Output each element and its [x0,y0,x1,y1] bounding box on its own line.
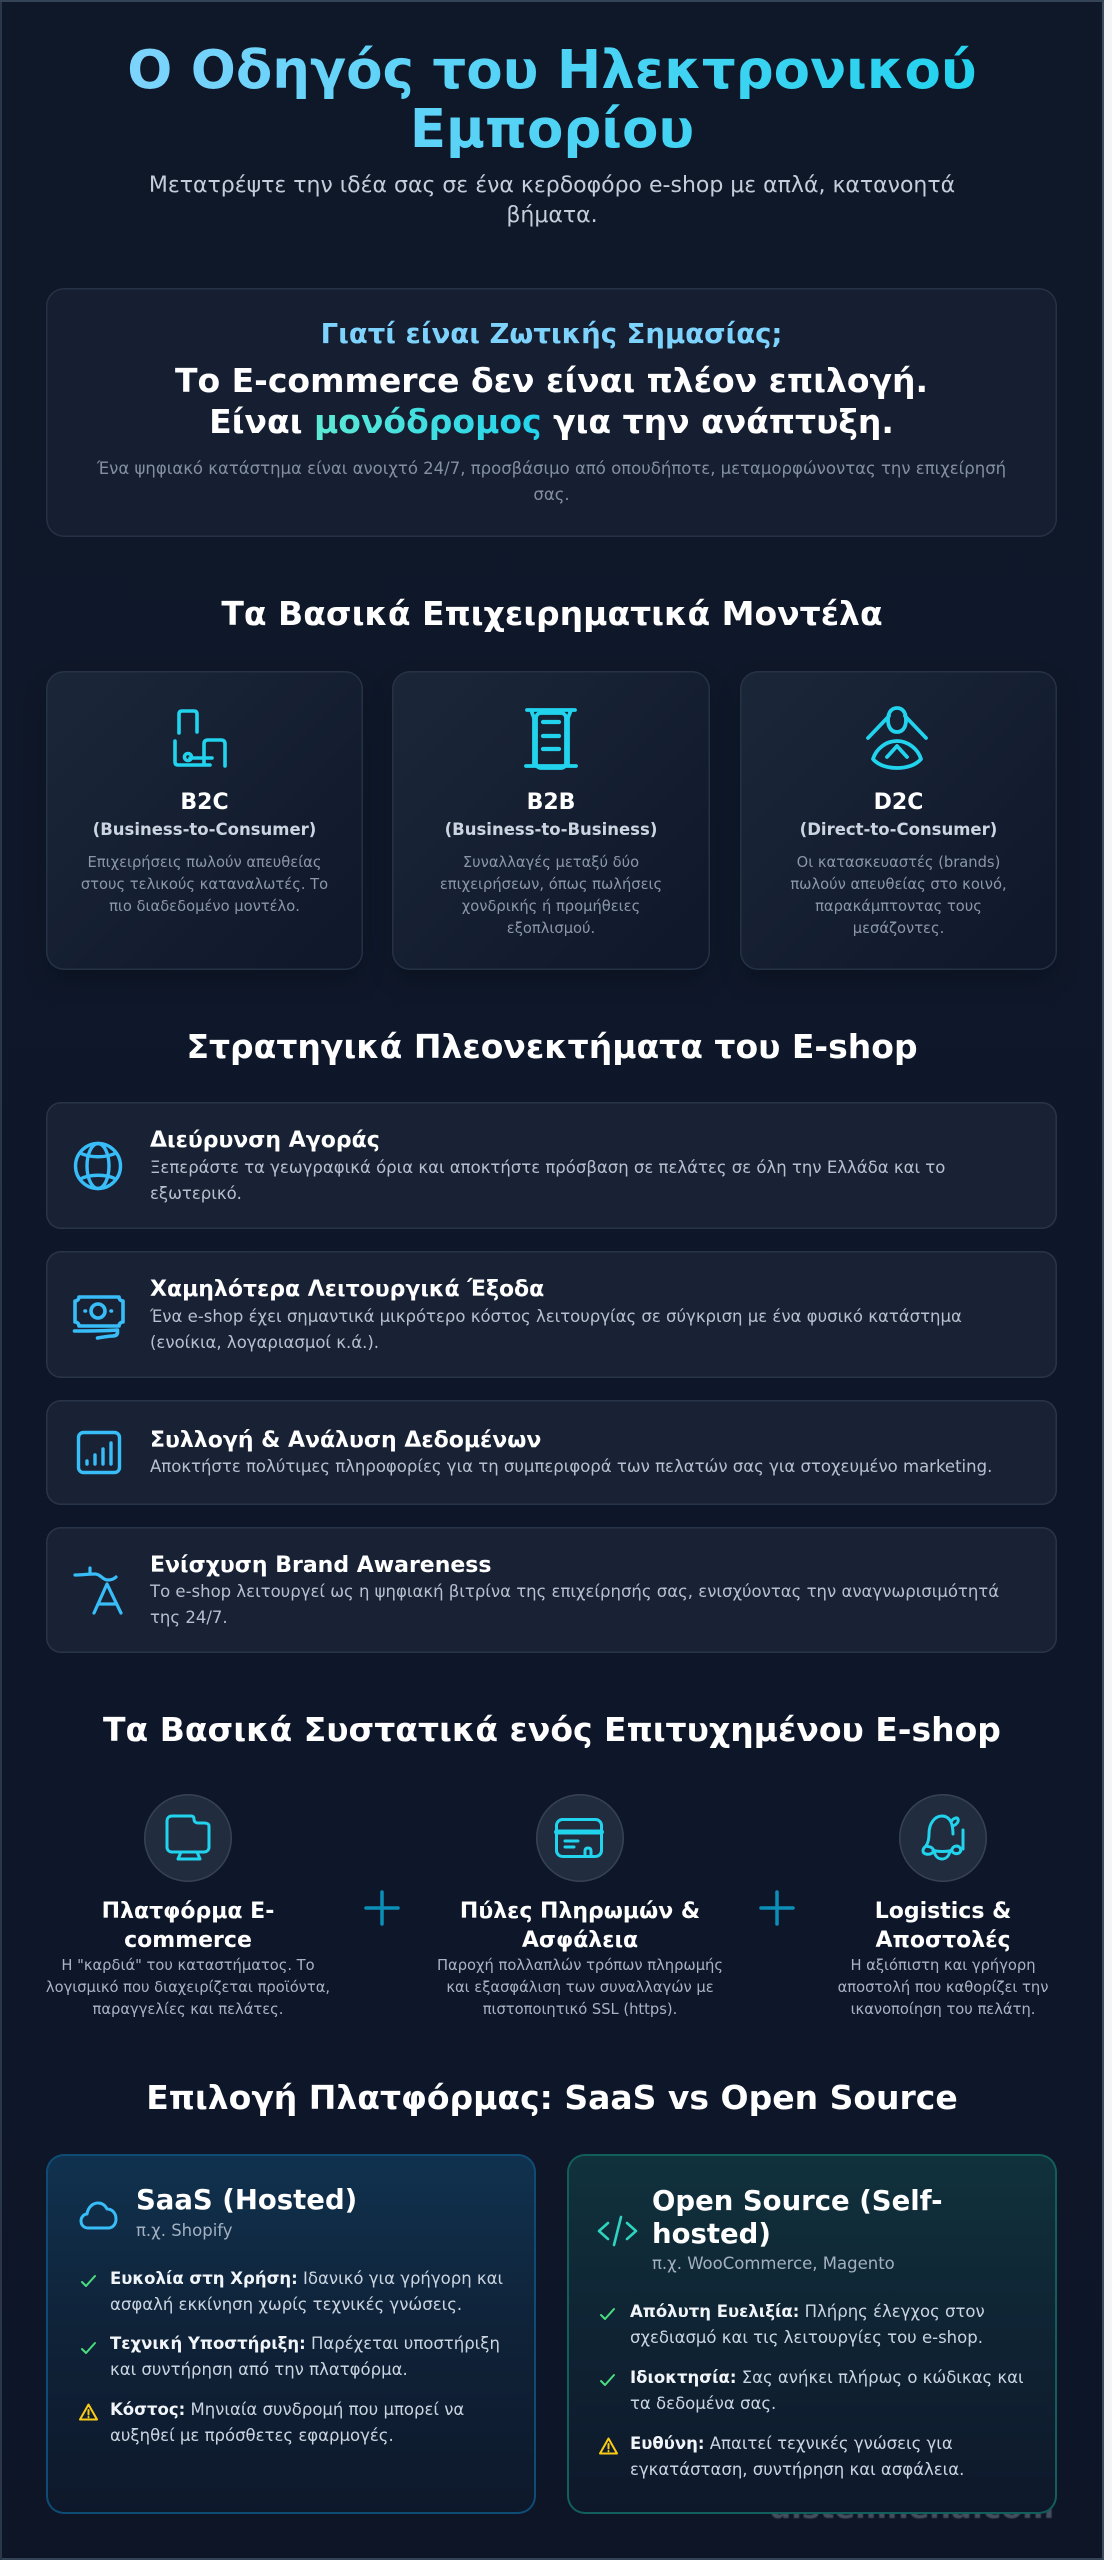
description: της 24/7. [150,1608,228,1627]
title [102,1899,274,1953]
title [460,1899,700,1953]
icon: cloud [80,2202,118,2230]
list item: flexibility: σχεδιασμό και τις λειτουργίες του e-shop. [630,2328,983,2347]
title: Ενίσχυση Brand Awareness [150,1553,492,1578]
panel heading: Γιατί είναι Ζωτικής Σημασίας; [321,318,782,350]
icon: B2B building [524,708,578,770]
list item: support: και συντήρηση από την πλατφόρμα. [110,2360,408,2379]
list item: ownership: τα δεδομένα σας. [630,2394,776,2413]
plus sign [759,1890,795,1926]
description [150,1158,945,1203]
description: χονδρικής ή προμήθειες [462,898,640,915]
title [127,40,977,160]
title: Πλατφόρμα E- [102,1899,274,1924]
description: λογισμικό που διαχειρίζεται προϊόντα, [46,1979,330,1996]
list item: support: Τεχνική Υποστήριξη: Παρέχεται υποστήριξη [110,2334,500,2353]
subtitle: βήματα. [506,203,598,228]
list item: flexibility: Απόλυτη Ευελιξία: Πλήρης έλεγχος στον [630,2302,985,2321]
icon: warning [599,2437,618,2455]
icon: warning [79,2404,98,2420]
title: Συλλογή & Ανάλυση Δεδομένων [150,1428,541,1453]
icon: credit card in circle [536,1794,624,1882]
list item: responsibility: εγκατάσταση, συντήρηση και ασφάλεια. [630,2460,964,2479]
list item: ease of use: ασφαλή εκκίνηση χωρίς τεχνικές γνώσεις. [110,2295,462,2314]
subtitle: π.χ. WooCommerce, Magento [652,2254,895,2273]
title: Ο Οδηγός του Ηλεκτρονικού [127,40,977,101]
description: πιστοποιητικό SSL (https). [483,2001,677,2018]
description: στους τελικούς καταναλωτές. Το [81,876,328,893]
plus sign [364,1890,400,1926]
description: Η "καρδιά" του καταστήματος. Το [61,1957,315,1974]
description: Ξεπεράστε τα γεωγραφικά όρια και αποκτήστε πρόσβαση σε πελάτες σε όλη την Ελλάδα και το [150,1158,945,1177]
description: ικανοποίηση του πελάτη. [851,2001,1035,2018]
supporting text [96,459,1006,504]
subtitle [149,173,955,228]
panel: data analysis [46,1400,1057,1505]
description: εξωτερικό. [150,1184,242,1203]
description [440,854,662,937]
supporting text: Ένα ψηφιακό κατάστημα είναι ανοιχτό 24/7, προσβάσιμο από οπουδήποτε, μεταμορφώνοντας την επιχείρησή [97,459,1006,478]
title: Open Source (Self- [652,2185,943,2217]
list item: ownership: Ιδιοκτησία: Σας ανήκει πλήρως ο κώδικας και [630,2368,1024,2387]
list item: cost: αυξηθεί με πρόσθετες εφαρμογές. [110,2426,394,2445]
panel: D2C [740,671,1057,970]
description: Επιχειρήσεις πωλούν απευθείας [88,854,321,871]
list item: ownership [630,2368,1024,2413]
description: μεσάζοντες. [853,920,944,937]
description [790,854,1007,937]
list item: responsibility: Ευθύνη: Απαιτεί τεχνικές γνώσεις για [630,2434,953,2453]
main statement [175,361,928,441]
description [437,1957,723,2018]
panel: B2B [392,671,710,970]
title: Πύλες Πληρωμών & [460,1899,700,1924]
title: SaaS (Hosted) [136,2184,357,2216]
title [875,1899,1011,1953]
icon: bell in circle [899,1794,987,1882]
list item: flexibility [630,2302,985,2347]
subtitle: π.χ. Shopify [136,2221,233,2240]
list item: ease of use [110,2269,503,2314]
description: (ενοίκια, λογαριασμοί κ.ά.). [150,1333,379,1352]
label: B2B [527,790,575,815]
title: Ασφάλεια [522,1928,638,1953]
description [81,854,328,915]
panel: why it matters [46,288,1057,537]
description: Συναλλαγές μεταξύ δύο [463,854,639,871]
description: Παροχή πολλαπλών τρόπων πληρωμής [437,1957,723,1974]
component: payments [437,1794,723,2018]
title: Διεύρυνση Αγοράς [150,1128,380,1153]
sublabel: (Direct-to-Consumer) [800,820,997,839]
description: Το e-shop λειτουργεί ως η ψηφιακή βιτρίνα της επιχείρησής σας, ενισχύοντας την αναγνωρισιμότητά [150,1582,999,1601]
icon: code brackets [598,2216,638,2246]
heading: key ingredients: Τα Βασικά Συστατικά ενός Επιτυχημένου E-shop [103,1710,1001,1749]
panel: brand awareness [46,1527,1057,1653]
icon: globe [74,1142,122,1190]
description: Οι κατασκευαστές (brands) [797,854,1000,871]
icon: B2C storefront [173,709,227,768]
icon: check [81,2342,96,2354]
title: Logistics & [875,1899,1011,1924]
list item: support [110,2334,500,2379]
description: Η αξιόπιστη και γρήγορη [850,1957,1036,1974]
icon: D2C person [866,706,928,770]
title: Χαμηλότερα Λειτουργικά Έξοδα [150,1277,544,1302]
heading: business models: Τα Βασικά Επιχειρηματικά Μοντέλα [221,594,883,633]
sublabel: (Business-to-Business) [445,820,657,839]
description [46,1957,330,2018]
panel: SaaS [46,2154,536,2514]
title [652,2185,943,2250]
description: παρακάμπτοντας τους [815,898,982,915]
component: platform [46,1794,330,2018]
title: hosted) [652,2218,771,2250]
description: παραγγελίες και πελάτες. [93,2001,283,2018]
list item: responsibility [630,2431,964,2483]
description [150,1307,962,1352]
description: πιο διαδεδομένο μοντέλο. [109,898,300,915]
description [838,1957,1048,2018]
watermark: distemhena.com [769,2491,1054,2526]
label: B2C [180,790,229,815]
description: Ένα e-shop έχει σημαντικά μικρότερο κόστος λειτουργίας σε σύγκριση με ένα φυσικό κατάστημα [150,1307,962,1326]
subtitle: Μετατρέψτε την ιδέα σας σε ένα κερδοφόρο e-shop με απλά, κατανοητά [149,173,955,198]
list item: cost: Κόστος: Μηνιαία συνδρομή που μπορεί να [110,2400,464,2419]
icon: translate [73,1566,123,1615]
component: logistics [838,1794,1048,2018]
panel: market expansion [46,1102,1057,1229]
list item: ease of use: Ευκολία στη Χρήση: Ιδανικό για γρήγορη και [110,2269,503,2288]
description: αποστολή που καθορίζει την [838,1979,1048,1996]
sublabel: (Business-to-Consumer) [93,820,316,839]
heading: platform choice: Επιλογή Πλατφόρμας: SaaS vs Open Source [146,2078,958,2117]
description [150,1582,999,1627]
heading: strategic advantages: Στρατηγικά Πλεονεκτήματα του E-shop [186,1027,918,1066]
description: Αποκτήστε πολύτιμες πληροφορίες για τη συμπεριφορά των πελατών σας για στοχευμένο marketing. [150,1457,992,1476]
panel: B2C [46,671,363,970]
label: D2C [874,790,923,815]
title: Αποστολές [875,1928,1011,1953]
title: commerce [124,1928,252,1953]
icon: bar chart [76,1430,122,1474]
icon: check [81,2275,96,2287]
panel: Open Source [567,2154,1057,2514]
icon: check [600,2308,615,2320]
description: πωλούν απευθείας στο κοινό, [790,876,1007,893]
description: και εξασφάλιση των συναλλαγών με [446,1979,714,1996]
list item: cost [110,2400,464,2445]
panel: lower costs [46,1251,1057,1378]
icon: monitor in circle [144,1794,232,1882]
icon: check [600,2374,615,2386]
main statement: Το E-commerce δεν είναι πλέον επιλογή. [175,361,928,400]
description: εξοπλισμού. [507,920,595,937]
title: Εμπορίου [410,99,694,160]
icon: banknote [72,1295,125,1340]
description: επιχειρήσεων, όπως πωλήσεις [440,876,662,893]
main statement: Είναι μονόδρομος για την ανάπτυξη. [209,402,894,441]
supporting text: σας. [533,485,570,504]
